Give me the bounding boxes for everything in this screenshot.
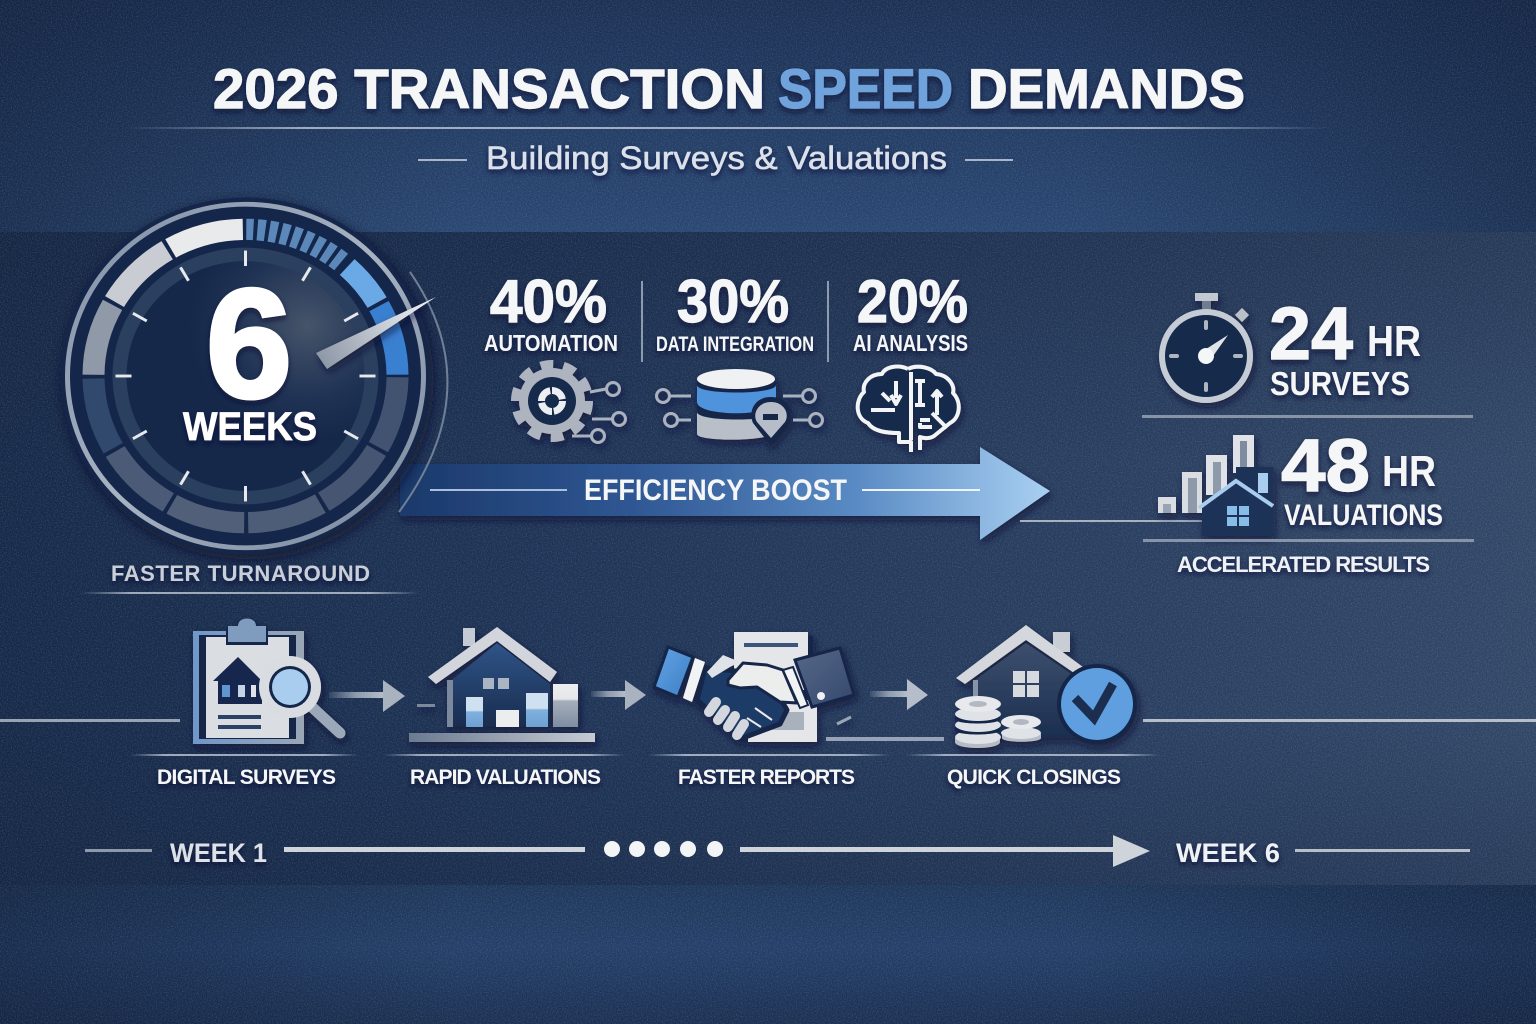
icon: database	[656, 369, 822, 446]
icon: brain	[858, 367, 959, 452]
icon: house, coins and check	[955, 625, 1137, 748]
arrow: step 3 to 4	[870, 679, 928, 710]
stat: ai analysis	[853, 268, 968, 356]
stat: ai analysis: AI ANALYSIS	[853, 330, 968, 356]
stat: automation	[484, 268, 618, 356]
stat: 48 hr valuations: HR	[1382, 447, 1436, 496]
stat: data integration: DATA INTEGRATION	[656, 333, 814, 356]
stat: automation: 40%	[490, 268, 607, 335]
step: digital surveys	[130, 618, 358, 789]
process baseline	[0, 719, 1536, 741]
arrow label: EFFICIENCY BOOST	[584, 474, 847, 507]
label: FASTER REPORTS	[678, 766, 855, 789]
label: DIGITAL SURVEYS	[157, 766, 336, 789]
stat: 24 hr surveys: HR	[1367, 317, 1421, 366]
stat: 48 hr valuations: VALUATIONS	[1284, 499, 1443, 532]
timeline arrowhead	[1113, 835, 1150, 867]
gauge: 6 weeks	[58, 194, 448, 566]
icon: stopwatch	[1162, 293, 1250, 400]
stat: 48 hr valuations: 48	[1281, 424, 1370, 507]
stat: 24 hr surveys: SURVEYS	[1270, 365, 1410, 402]
needle	[316, 297, 436, 369]
gauge segments	[82, 218, 408, 534]
faster turnaround caption: FASTER TURNAROUND	[111, 561, 370, 586]
accelerated results caption: ACCELERATED RESULTS	[1177, 552, 1430, 577]
tick marks	[116, 251, 376, 501]
title: DEMANDS	[968, 57, 1245, 120]
stat: 24 hr surveys: 24	[1269, 292, 1353, 375]
week 1 label: WEEK 1	[170, 838, 267, 868]
label: RAPID VALUATIONS	[410, 766, 601, 789]
step: quick closings	[906, 625, 1160, 789]
label: QUICK CLOSINGS	[947, 766, 1121, 789]
stat: automation: AUTOMATION	[484, 330, 618, 356]
arrow: step 1 to 2	[329, 680, 405, 712]
title: SPEED	[778, 57, 953, 120]
step: rapid valuations	[384, 627, 625, 789]
week timeline	[85, 835, 1470, 868]
stat: 48 hr valuations	[1281, 424, 1443, 532]
timeline dots	[604, 841, 723, 857]
stat: 24 hr surveys	[1269, 292, 1421, 402]
connector line to results	[1020, 520, 1205, 522]
stat: data integration: 30%	[677, 268, 789, 335]
icon: gear	[516, 365, 626, 442]
icon: house with bars	[409, 627, 595, 742]
gauge value: 6	[206, 257, 292, 430]
stat: ai analysis: 20%	[857, 268, 968, 335]
subtitle: Building Surveys & Valuations	[486, 140, 947, 176]
arrow: step 2 to 3	[591, 680, 646, 710]
stat: data integration	[656, 268, 814, 356]
icon: handshake over document	[654, 632, 854, 742]
efficiency boost arrow	[400, 447, 1050, 540]
gauge unit: WEEKS	[183, 405, 317, 449]
icon: bars and house	[1158, 435, 1273, 536]
week 6 label: WEEK 6	[1176, 838, 1280, 868]
icon: clipboard and magnifier	[193, 618, 340, 744]
stats dividers	[641, 281, 829, 362]
title	[213, 57, 1245, 120]
step: faster reports	[648, 632, 890, 789]
title: 2026 TRANSACTION	[213, 57, 765, 120]
inner dial	[112, 248, 378, 504]
